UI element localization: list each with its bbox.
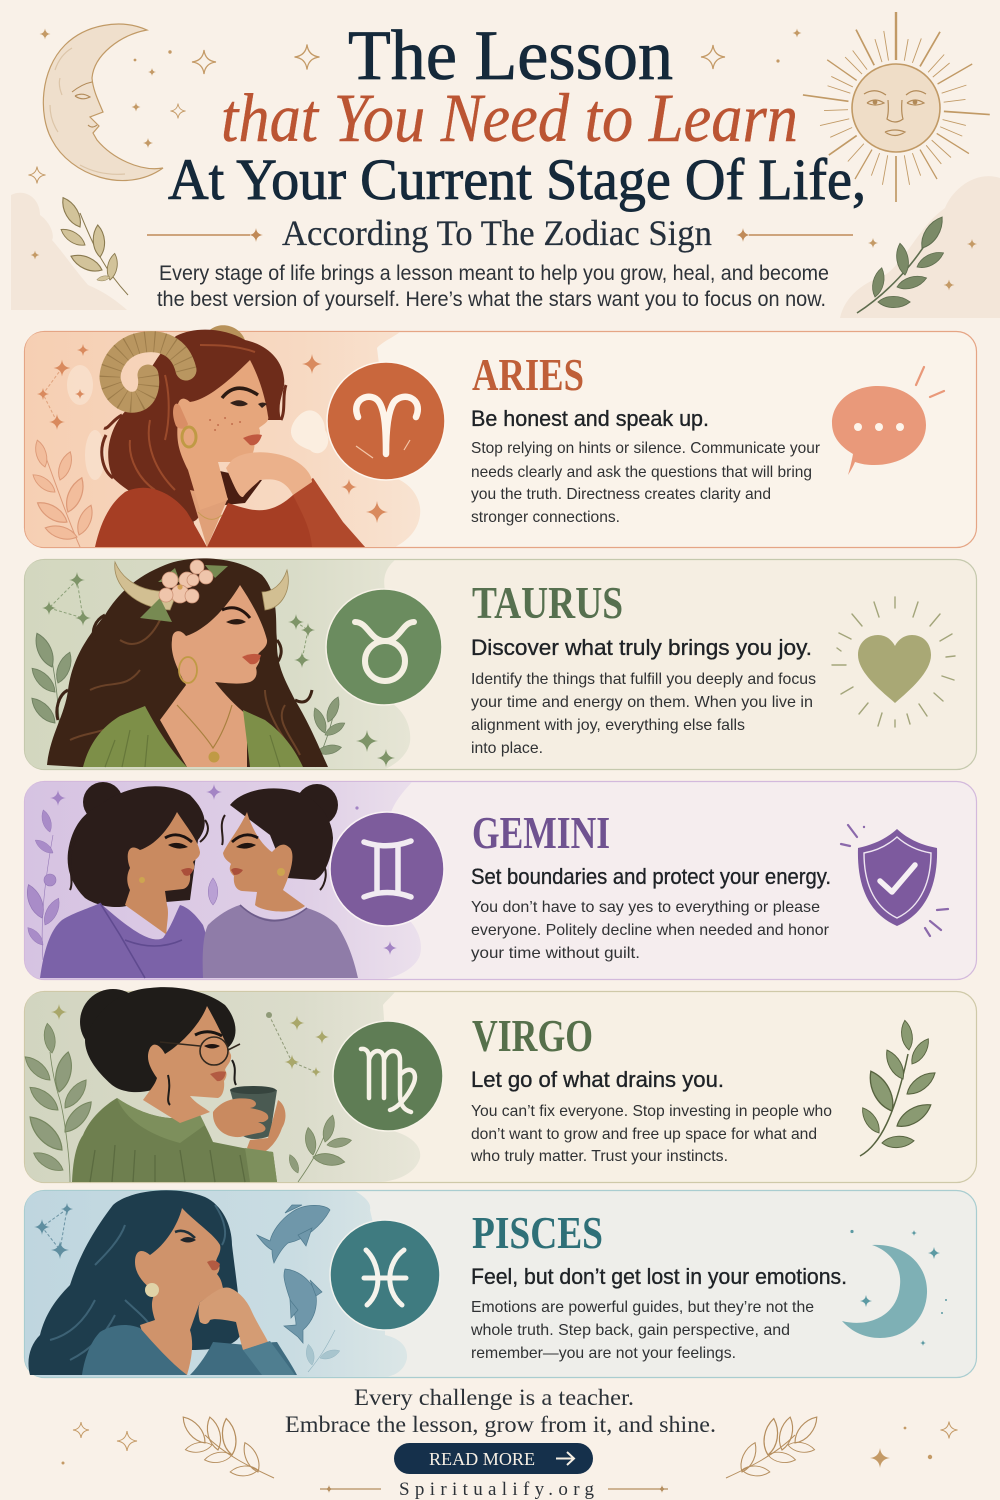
sparkles — [50, 784, 397, 955]
constellation — [37, 344, 388, 523]
pale wash patches — [67, 365, 328, 480]
body text — [470, 1103, 832, 1165]
portrait: ram-horned woman — [95, 325, 365, 547]
crescent moon with face — [43, 24, 163, 181]
button: read more: READ MORE — [429, 1449, 535, 1469]
panel: Pisces — [24, 1190, 976, 1378]
body text: everyone. Politely decline when needed and honor — [471, 922, 830, 939]
constellation — [51, 1004, 329, 1077]
sparkles: header — [28, 28, 977, 290]
cloud: top right wash — [840, 176, 1000, 318]
body text: remember—you are not your feelings. — [471, 1345, 736, 1362]
title — [168, 17, 866, 212]
body text: alignment with joy, everything else falls — [471, 717, 745, 734]
leaves — [28, 631, 347, 767]
intro text — [157, 262, 829, 311]
body text: Emotions are powerful guides, but they’re not the — [471, 1299, 814, 1316]
closing message — [285, 1385, 716, 1437]
closing message: Embrace the lesson, grow from it, and shine. — [285, 1412, 716, 1437]
heading: PISCES — [472, 1207, 603, 1258]
lesson title: Feel, but don’t get lost in your emotions. — [471, 1264, 847, 1289]
zodiac circle: Virgo — [333, 1021, 443, 1131]
body text: who truly matter. Trust your instincts. — [470, 1148, 728, 1165]
constellation — [34, 1203, 73, 1259]
body text: Stop relying on hints or silence. Communicate your — [471, 440, 821, 457]
zodiac circle: Aries — [327, 362, 445, 480]
icon: leafy branch — [858, 1020, 939, 1156]
body text — [471, 671, 816, 757]
body text: You don’t have to say yes to everything or please — [471, 899, 820, 916]
heading: ARIES — [472, 349, 584, 400]
lesson title: Be honest and speak up. — [471, 406, 709, 431]
body text — [470, 1299, 814, 1362]
panel: Gemini — [23, 782, 976, 980]
card background — [24, 1190, 976, 1378]
intro text: Every stage of life brings a lesson meant to help you grow, heal, and become — [159, 262, 829, 285]
sprig: top left olive — [58, 195, 128, 295]
card background — [24, 992, 976, 1182]
title: that You Need to Learn — [221, 80, 798, 156]
body text: your time and energy on them. When you live in — [471, 694, 813, 711]
panel: Virgo — [21, 987, 977, 1182]
watercolor wash — [25, 560, 410, 769]
intro text: the best version of yourself. Here’s what the stars want you to focus on now. — [157, 288, 826, 311]
body text: needs clearly and ask the questions that will bring — [471, 464, 812, 481]
lesson title: Let go of what drains you. — [471, 1067, 724, 1092]
sparkles: footer — [62, 1422, 958, 1468]
icon: shield with check — [841, 825, 948, 936]
sprig: top right green — [857, 214, 948, 313]
closing message: Every challenge is a teacher. — [354, 1385, 634, 1410]
icon: radiant heart — [832, 597, 955, 727]
body text: you the truth. Directness creates clarity and — [471, 486, 771, 503]
constellation — [42, 572, 395, 767]
icon: speech bubble — [832, 367, 944, 475]
zodiac circle: Pisces — [330, 1220, 440, 1330]
body text: stronger connections. — [471, 509, 620, 526]
leaves — [305, 1330, 341, 1372]
portrait: woman with bull horns and flowers — [47, 558, 328, 767]
portrait: woman with long blue hair — [28, 1190, 297, 1375]
sprig: footer right — [726, 1413, 821, 1478]
title: The Lesson — [348, 17, 673, 95]
body text: You can’t fix everyone. Stop investing in people who — [471, 1103, 832, 1120]
heading: GEMINI — [472, 807, 610, 858]
body text — [471, 899, 830, 962]
website credit: Spiritualify.org — [399, 1479, 594, 1500]
card background — [24, 560, 976, 770]
heading: VIRGO — [472, 1010, 593, 1061]
body text: don’t want to grow and free up space for what and — [471, 1126, 817, 1143]
body text — [471, 440, 821, 526]
sprig: footer left — [179, 1413, 274, 1478]
panel: Aries — [24, 325, 976, 548]
zodiac circle: Gemini — [330, 812, 444, 926]
leaves — [21, 1023, 352, 1182]
portrait: woman with glasses and mug — [72, 987, 285, 1182]
watercolor wash — [25, 332, 420, 547]
body text: whole truth. Step back, gain perspective, and — [470, 1322, 790, 1339]
heading: TAURUS — [472, 577, 623, 628]
card background — [24, 332, 976, 548]
subtitle with dividers — [147, 213, 853, 253]
zodiac circle: Taurus — [326, 589, 442, 705]
title: At Your Current Stage Of Life, — [168, 147, 866, 212]
subtitle with dividers: According To The Zodiac Sign — [282, 213, 712, 253]
body text: Identify the things that fulfill you deeply and focus — [471, 671, 816, 688]
lesson title: Set boundaries and protect your energy. — [471, 864, 831, 889]
watercolor wash — [25, 992, 420, 1182]
panel: Taurus — [24, 558, 976, 770]
leaves — [30, 439, 96, 547]
portrait: twin sisters facing each other — [40, 782, 358, 978]
leaves — [23, 809, 218, 960]
website credit — [320, 1479, 668, 1500]
body text: into place. — [471, 740, 543, 757]
sun with face — [803, 12, 990, 202]
watercolor wash — [25, 782, 421, 979]
button: read more — [394, 1443, 593, 1474]
icon: teal crescent moon — [842, 1230, 947, 1346]
lesson title: Discover what truly brings you joy. — [471, 635, 812, 660]
cloud: top left wash — [11, 193, 127, 310]
fish pair — [257, 1205, 330, 1343]
body text: your time without guilt. — [471, 945, 640, 962]
watercolor wash — [25, 1191, 407, 1377]
card background — [24, 782, 976, 980]
